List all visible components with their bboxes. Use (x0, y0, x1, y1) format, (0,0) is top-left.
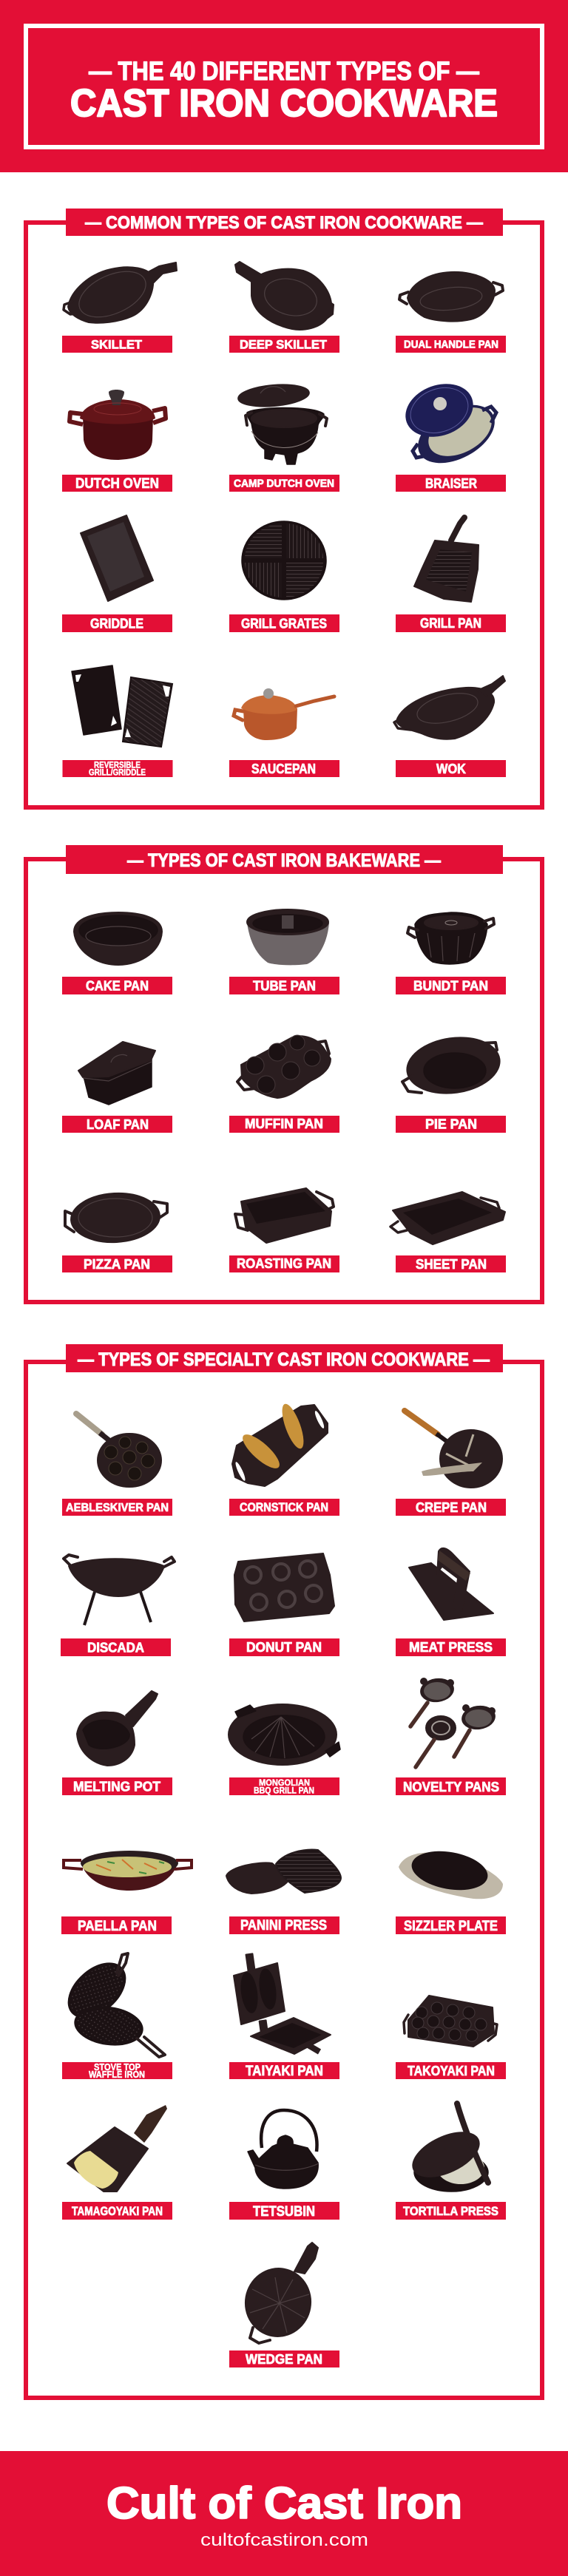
label: donut pan (229, 1638, 339, 1656)
label: discada (61, 1638, 171, 1656)
item: meat press (396, 1548, 506, 1656)
label: griddle (62, 614, 172, 632)
icon: pie pan (402, 1032, 504, 1099)
label: paella pan: PAELLA PAN (78, 1919, 157, 1934)
icon: griddle (81, 515, 153, 601)
icon: camp dutch oven (237, 382, 327, 464)
icon: taiyaki pan (234, 1953, 331, 2054)
item: sheet pan (390, 1192, 506, 1272)
label: stove top waffle iron: WAFFLE IRON (89, 2070, 145, 2080)
label: tube pan (229, 977, 339, 994)
icon: roasting pan (235, 1188, 334, 1243)
label: novelty pans: NOVELTY PANS (403, 1780, 499, 1794)
item: camp dutch oven (229, 382, 339, 492)
item: tamagoyaki pan (62, 2105, 172, 2220)
label: roasting pan: ROASTING PAN (237, 1256, 331, 1271)
footer brand: Cult of Cast Iron (106, 2478, 462, 2528)
item: aebleskiver pan (62, 1414, 172, 1516)
label: muffin pan: MUFFIN PAN (245, 1116, 323, 1131)
item: stove top waffle iron (59, 1953, 172, 2080)
label: saucepan: SAUCEPAN (251, 762, 316, 776)
label: skillet (62, 336, 172, 353)
label: sheet pan (396, 1255, 506, 1272)
label: paella pan (61, 1916, 172, 1934)
label: griddle: GRIDDLE (90, 617, 143, 631)
icon: paella pan (64, 1851, 192, 1891)
item: pizza pan (62, 1191, 172, 1272)
item: muffin pan (229, 1035, 339, 1133)
label: tetsubin: TETSUBIN (253, 2204, 315, 2220)
item: melting pot (62, 1691, 172, 1795)
label: deep skillet: DEEP SKILLET (240, 337, 328, 352)
icon: mongolian bbq grill pan (229, 1704, 340, 1765)
item: tetsubin (229, 2110, 339, 2220)
label: skillet: SKILLET (91, 337, 143, 352)
label: panini press: PANINI PRESS (240, 1918, 327, 1933)
label: tamagoyaki pan: TAMAGOYAKI PAN (72, 2204, 163, 2218)
item: grill grates (229, 521, 339, 632)
label: mongolian bbq grill pan (229, 1777, 339, 1795)
label: mongolian bbq grill pan: BBQ GRILL PAN (254, 1785, 314, 1795)
heading: common types (66, 209, 503, 236)
label: camp dutch oven: CAMP DUTCH OVEN (234, 478, 334, 489)
icon: loaf pan (78, 1042, 155, 1105)
label: grill pan: GRILL PAN (420, 616, 481, 631)
heading: specialty: — TYPES OF SPECIALTY CAST IRON COOKWARE — (78, 1349, 490, 1370)
label: takoyaki pan: TAKOYAKI PAN (408, 2064, 495, 2078)
label: meat press (396, 1638, 506, 1656)
label: loaf pan (62, 1116, 172, 1133)
label: taiyaki pan: TAIYAKI PAN (246, 2064, 323, 2079)
label: braiser: BRAISER (425, 476, 477, 491)
label: tetsubin (229, 2202, 339, 2220)
icon: aebleskiver pan (76, 1414, 161, 1487)
item: paella pan (61, 1851, 192, 1934)
label: saucepan (229, 760, 339, 777)
panel: bakeware (26, 845, 542, 1302)
label: bundt pan: BUNDT PAN (413, 979, 488, 994)
item: skillet (62, 262, 177, 353)
title line 1: — THE 40 DIFFERENT TYPES OF — (89, 57, 479, 86)
item: tortilla press (396, 2104, 506, 2220)
item: bundt pan (396, 912, 506, 994)
item: roasting pan (229, 1188, 339, 1272)
header banner (0, 0, 568, 172)
item: tube pan (229, 909, 339, 994)
footer url: cultofcastiron.com (200, 2530, 368, 2550)
label: bundt pan (396, 977, 506, 994)
item: saucepan (229, 688, 339, 777)
icon: cake pan (74, 912, 162, 965)
icon: tamagoyaki pan (67, 2105, 167, 2192)
label: wedge pan: WEDGE PAN (246, 2352, 322, 2367)
label: tamagoyaki pan (62, 2202, 172, 2220)
label: grill grates: GRILL GRATES (241, 617, 327, 631)
icon: grill grates (242, 521, 326, 600)
icon: muffin pan (237, 1035, 331, 1098)
label: melting pot: MELTING POT (73, 1779, 160, 1794)
label: stove top waffle iron (62, 2062, 172, 2080)
icon: wok (394, 676, 505, 739)
icon: takoyaki pan (404, 1996, 497, 2047)
label: camp dutch oven (229, 475, 339, 492)
label: pizza pan (62, 1255, 172, 1272)
icon: dutch oven (70, 390, 166, 460)
icon: discada (64, 1555, 175, 1625)
item: discada (61, 1555, 175, 1656)
icon: panini press (226, 1850, 341, 1894)
label: reversible grill/griddle: REVERSIBLE (94, 762, 141, 770)
item: taiyaki pan (229, 1953, 339, 2079)
item: wedge pan (229, 2243, 339, 2367)
icon: donut pan (234, 1553, 334, 1621)
label: meat press: MEAT PRESS (409, 1640, 493, 1655)
label: wok: WOK (436, 762, 466, 776)
item: cornstick pan (229, 1402, 339, 1516)
label: sizzler plate: SIZZLER PLATE (404, 1919, 498, 1934)
label: wok (396, 760, 506, 777)
label: pizza pan: PIZZA PAN (84, 1257, 150, 1272)
item: griddle (62, 515, 172, 632)
label: crepe pan: CREPE PAN (416, 1500, 487, 1515)
icon: saucepan (234, 688, 334, 740)
label: donut pan: DONUT PAN (246, 1640, 322, 1655)
label: crepe pan (396, 1499, 506, 1516)
label: deep skillet (229, 336, 339, 353)
label: melting pot (62, 1777, 172, 1795)
label: discada: DISCADA (87, 1640, 144, 1655)
item: cake pan (62, 912, 172, 994)
item: novelty pans (396, 1676, 506, 1795)
label: loaf pan: LOAF PAN (87, 1117, 149, 1132)
label: wedge pan (229, 2350, 339, 2367)
icon: tetsubin (248, 2110, 319, 2189)
label: mongolian bbq grill pan: MONGOLIAN (259, 1777, 310, 1788)
icon: grill pan (414, 518, 479, 602)
icon: novelty pans (410, 1676, 497, 1767)
item: panini press (226, 1850, 341, 1934)
icon: braiser (398, 375, 504, 475)
label: dual handle pan: DUAL HANDLE PAN (404, 339, 498, 350)
icon: meat press (409, 1548, 493, 1620)
label: cornstick pan: CORNSTICK PAN (240, 1500, 328, 1514)
label: cake pan: CAKE PAN (86, 979, 149, 994)
icon: sizzler plate (399, 1845, 503, 1899)
label: tube pan: TUBE PAN (253, 979, 316, 994)
item: braiser (396, 375, 506, 492)
item: loaf pan (62, 1042, 172, 1133)
icon: tortilla press (406, 2104, 488, 2192)
donut rings (245, 1561, 322, 1610)
label: dual handle pan (396, 336, 506, 353)
panel: common types (26, 209, 542, 807)
icon: tube pan (247, 909, 329, 965)
label: braiser (396, 475, 506, 492)
label: sheet pan: SHEET PAN (416, 1257, 487, 1272)
icon: bundt pan (408, 912, 494, 964)
item: pie pan (396, 1032, 506, 1133)
label: dutch oven: DUTCH OVEN (75, 476, 159, 492)
icon: cornstick pan (232, 1402, 328, 1486)
icon: sheet pan (390, 1192, 505, 1244)
item: grill pan (396, 518, 506, 632)
label: pie pan: PIE PAN (425, 1116, 477, 1131)
label: stove top waffle iron: STOVE TOP (94, 2062, 141, 2072)
heading: specialty (66, 1344, 503, 1372)
icon: crepe pan (405, 1411, 502, 1488)
label: aebleskiver pan (62, 1499, 172, 1516)
item: deep skillet (229, 262, 339, 353)
icon: pizza pan (65, 1191, 167, 1244)
panel: specialty (26, 1344, 542, 2398)
label: muffin pan (229, 1116, 339, 1133)
item: crepe pan (396, 1411, 506, 1516)
item: mongolian bbq grill pan (229, 1704, 340, 1795)
label: pie pan (396, 1116, 506, 1133)
icon: reversible grill griddle (72, 665, 172, 747)
item: donut pan (229, 1553, 339, 1656)
footer banner (0, 2451, 568, 2576)
icon: stove top waffle iron (59, 1953, 165, 2057)
icon: deep skillet (235, 262, 334, 330)
item: wok (394, 676, 506, 777)
item: sizzler plate (396, 1845, 506, 1934)
icon: dual handle pan (399, 272, 503, 322)
label: cake pan (62, 977, 172, 994)
label: tortilla press: TORTILLA PRESS (403, 2204, 498, 2218)
heading: common types: — COMMON TYPES OF CAST IRON COOKWARE — (85, 213, 483, 233)
icon: melting pot (77, 1691, 158, 1766)
icon: wedge pan (240, 2243, 318, 2343)
heading: bakeware (66, 845, 503, 874)
label: reversible grill/griddle: GRILL/GRIDDLE (89, 769, 146, 778)
item: dual handle pan (396, 272, 506, 353)
item: takoyaki pan (396, 1996, 506, 2079)
icon: skillet (64, 262, 177, 326)
item: reversible grill/griddle (62, 665, 173, 778)
label: grill pan (396, 614, 506, 632)
heading: bakeware: — TYPES OF CAST IRON BAKEWARE — (127, 850, 441, 871)
label: aebleskiver pan: AEBLESKIVER PAN (66, 1502, 169, 1514)
item: dutch oven (62, 390, 172, 492)
label: reversible grill/griddle (62, 760, 173, 778)
title line 2: CAST IRON COOKWARE (70, 82, 498, 125)
